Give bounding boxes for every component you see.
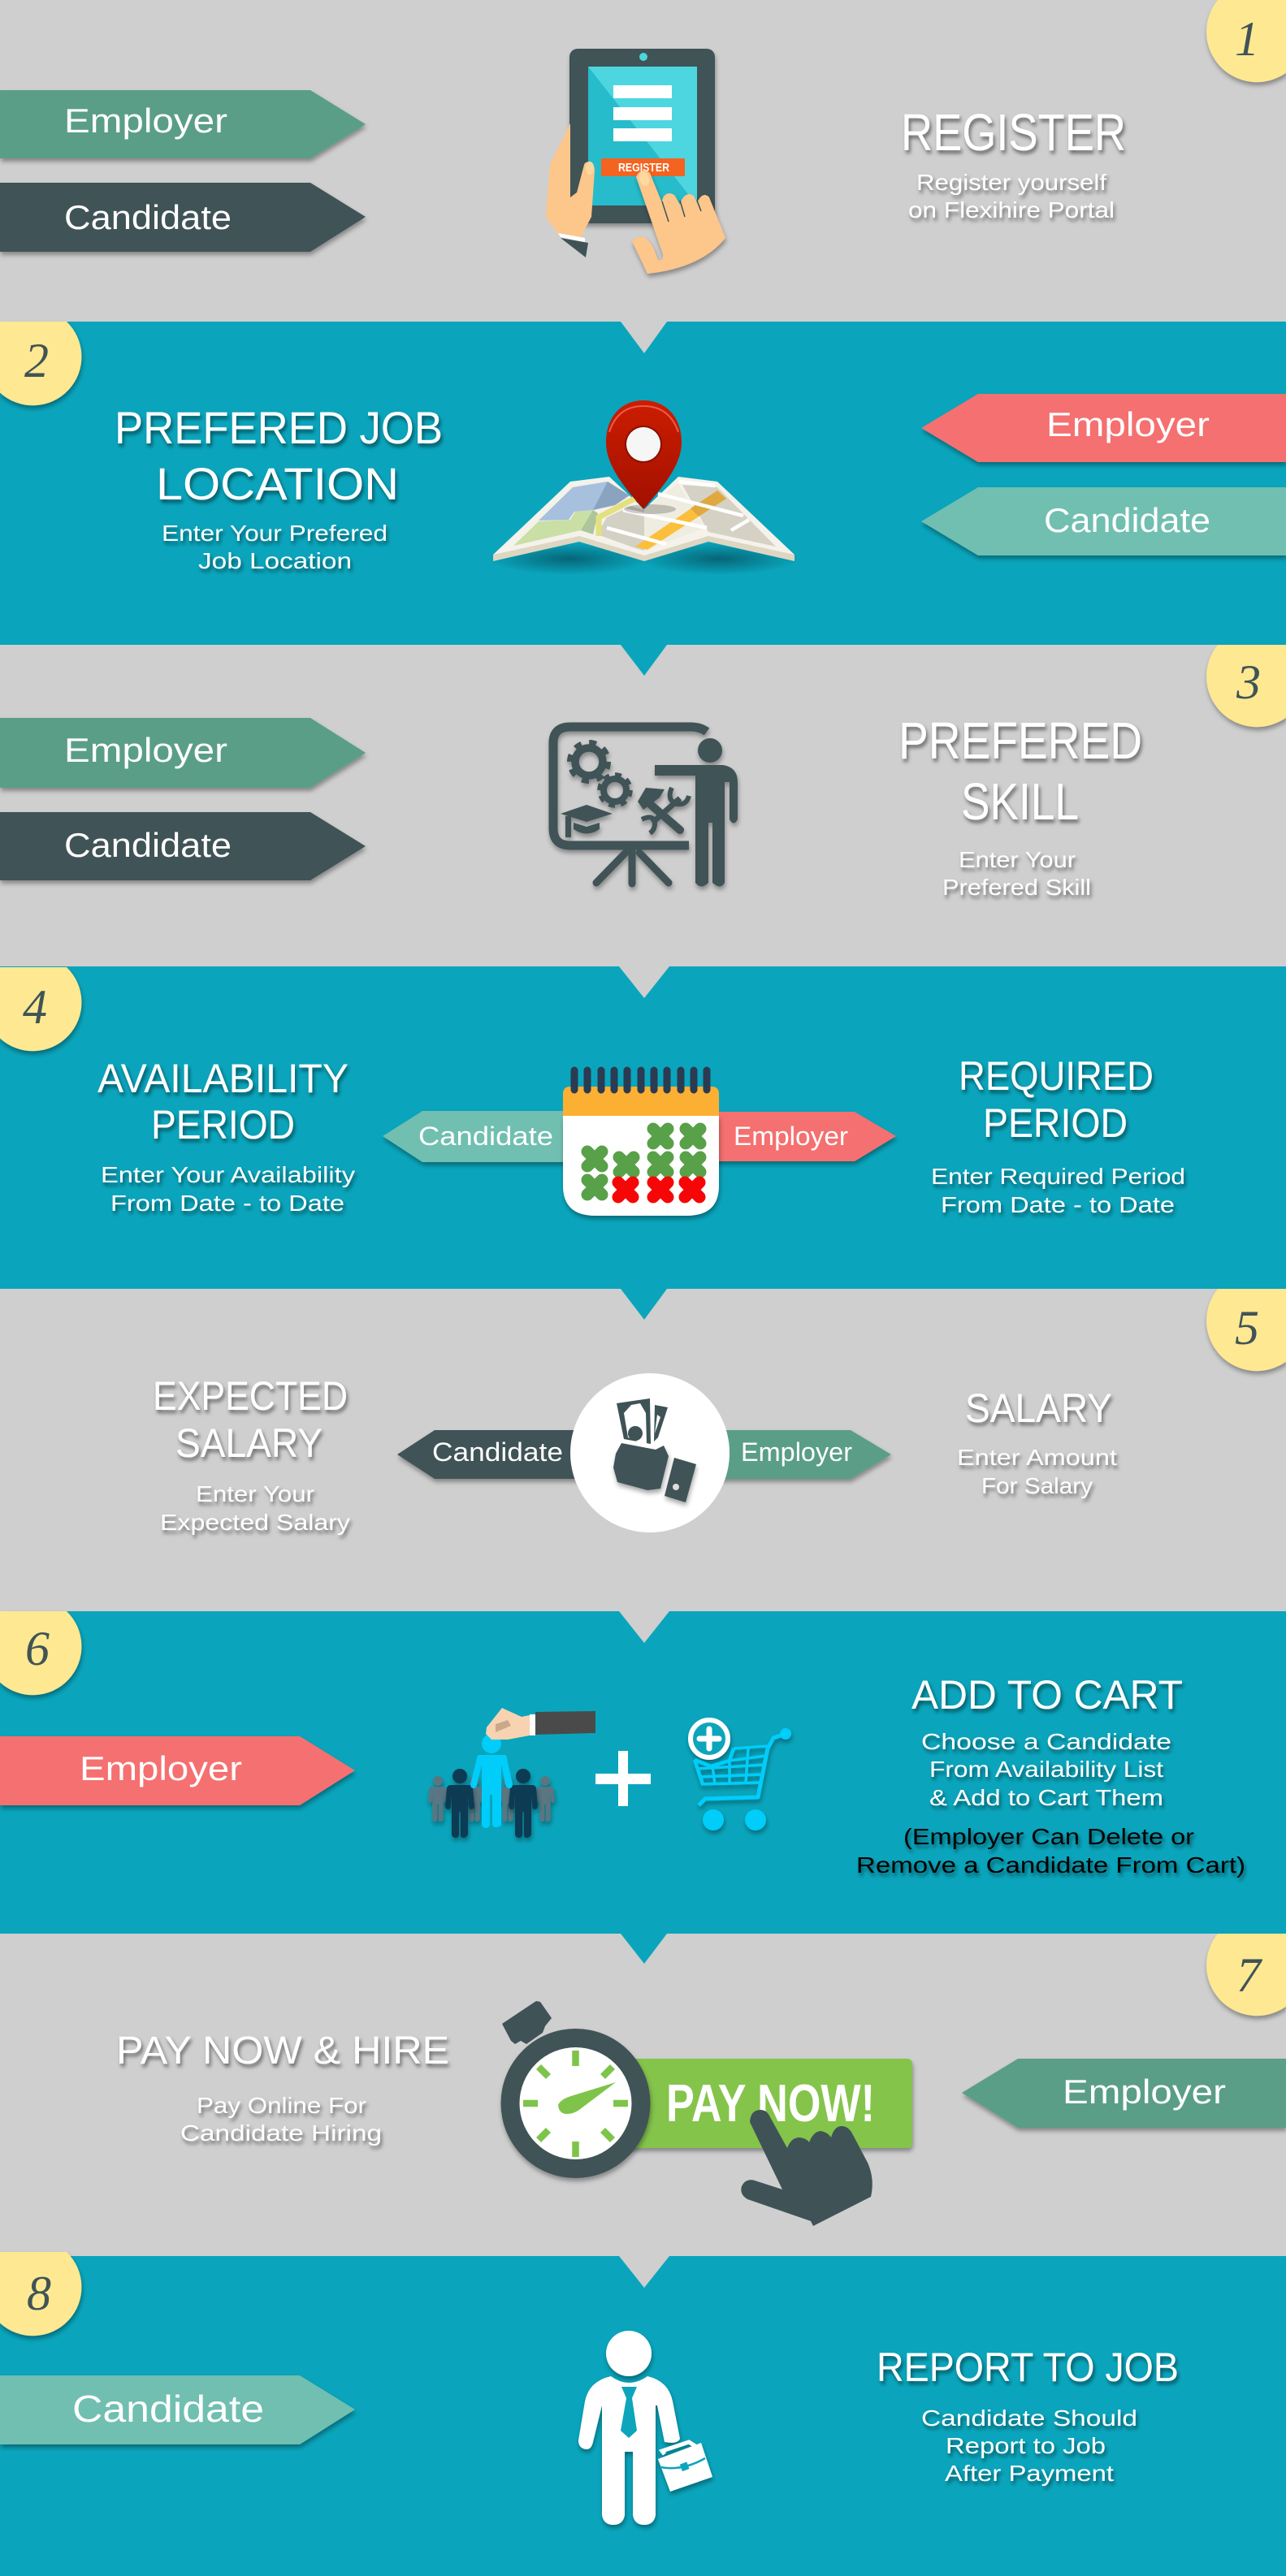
pointer triangle 8 <box>619 2256 669 2288</box>
text: availability description <box>101 1162 355 1216</box>
pointer triangle 2 <box>621 322 667 353</box>
band background 1 <box>0 0 1286 322</box>
text: expected salary description <box>160 1481 350 1535</box>
text: add to cart description: & Add to Cart Them <box>929 1785 1163 1810</box>
arrow: employer <box>0 1736 355 1805</box>
text: skill description: Prefered Skill <box>942 875 1091 900</box>
icon: stopwatch <box>500 2001 650 2178</box>
icon: pointing hand <box>741 2110 872 2226</box>
text: report description: Report to Job <box>946 2433 1106 2458</box>
text: employer note: (Employer Can Delete or <box>903 1824 1194 1849</box>
text: pay description: Pay Online For <box>197 2093 366 2118</box>
arrow: candidate left <box>397 1430 585 1479</box>
text: skill description <box>942 847 1091 900</box>
text: pay description <box>180 2093 382 2146</box>
panel: step 4 period <box>0 966 1286 1289</box>
icon: pay now button <box>626 2059 912 2148</box>
text: pay description: Candidate Hiring <box>180 2120 382 2146</box>
badge number 5: 5 <box>1235 1301 1259 1355</box>
heading: availability period: AVAILABILITY <box>97 1056 349 1101</box>
badge number 7: 7 <box>1236 1948 1263 2002</box>
text: add to cart description: From Availability List <box>929 1757 1163 1782</box>
heading: expected salary <box>153 1373 348 1466</box>
text: register description <box>908 170 1115 223</box>
arrow: employer right: Employer <box>741 1437 852 1467</box>
arrow: candidate: Candidate <box>64 198 232 236</box>
text: availability description: Enter Your Availability <box>101 1162 355 1187</box>
text: required description: From Date - to Date <box>941 1192 1175 1217</box>
text: required description: Enter Required Period <box>931 1164 1185 1189</box>
icon: plus sign <box>595 1751 651 1806</box>
text: add to cart description <box>921 1729 1171 1810</box>
text: location description <box>162 521 388 573</box>
heading: preferred skill: PREFERED <box>898 711 1142 770</box>
arrow: employer right <box>715 1430 891 1479</box>
heading: required period: REQUIRED <box>959 1053 1154 1099</box>
heading: register: REGISTER <box>901 103 1126 162</box>
heading: report to job: REPORT TO JOB <box>877 2345 1179 2390</box>
heading: salary: SALARY <box>965 1385 1112 1431</box>
badge number 4 <box>0 967 81 1051</box>
heading: expected salary: EXPECTED <box>153 1373 348 1419</box>
arrow: employer <box>0 90 366 158</box>
arrow: employer left: Employer <box>1063 2072 1226 2111</box>
badge number 2: 2 <box>24 334 49 387</box>
heading: preferred job location: PREFERED JOB <box>115 402 443 453</box>
pointer triangle 5 <box>621 1289 667 1320</box>
band background 4 <box>0 966 1286 1289</box>
arrow: candidate left <box>383 1111 569 1162</box>
panel: step 8 report to job <box>0 2252 1286 2576</box>
panel: step 7 pay now <box>0 1934 1286 2256</box>
text: availability description: From Date - to Date <box>110 1191 344 1216</box>
pointer triangle 4 <box>619 966 669 998</box>
band background 6 <box>0 1611 1286 1934</box>
text: register description: on Flexihire Portal <box>908 197 1115 223</box>
arrow: candidate <box>0 2375 355 2444</box>
heading: pay now and hire: PAY NOW & HIRE <box>116 2029 449 2072</box>
badge number 1: 1 <box>1235 12 1259 66</box>
band background 7 <box>0 1934 1286 2256</box>
icon: calendar <box>563 1070 719 1216</box>
text: location description: Enter Your Prefered <box>162 521 388 546</box>
arrow: candidate: Candidate <box>64 826 232 864</box>
band background 8 <box>0 2256 1286 2576</box>
arrow: employer: Employer <box>64 102 227 140</box>
icon: selecting a candidate <box>428 1708 595 1838</box>
text: expected salary description: Expected Salary <box>160 1510 350 1535</box>
band background 5 <box>0 1289 1286 1611</box>
text: add to cart description: Choose a Candidate <box>921 1729 1171 1754</box>
panel: step 3 preferred skill <box>0 645 1286 966</box>
text: report description: Candidate Should <box>921 2405 1137 2431</box>
text: location description: Job Location <box>198 548 352 573</box>
panel: step 6 add to cart <box>0 1611 1286 1934</box>
heading: add to cart: ADD TO CART <box>911 1672 1183 1718</box>
arrow: candidate left: Candidate <box>418 1122 553 1151</box>
badge number 5 <box>1206 1289 1286 1371</box>
arrow: employer: Employer <box>64 731 227 769</box>
heading: availability period <box>97 1056 349 1148</box>
badge number 2 <box>0 322 81 405</box>
arrow: employer: Employer <box>80 1749 242 1787</box>
text: salary description <box>957 1445 1117 1498</box>
text: register description: Register yourself <box>916 170 1106 195</box>
heading: preferred skill: SKILL <box>961 772 1079 831</box>
text: salary description: For Salary <box>981 1473 1093 1498</box>
badge number 3 <box>1206 645 1286 727</box>
arrow: employer right: Employer <box>734 1122 848 1151</box>
badge number 6: 6 <box>25 1622 50 1675</box>
panel: step 1 register <box>0 0 1286 322</box>
heading: preferred job location: LOCATION <box>156 458 399 509</box>
badge number 8 <box>0 2252 81 2336</box>
badge number 8: 8 <box>27 2267 51 2320</box>
arrow: candidate: Candidate <box>72 2388 264 2430</box>
text: report description: After Payment <box>945 2461 1114 2486</box>
arrow: employer right <box>921 394 1286 462</box>
text: salary description: Enter Amount <box>957 1445 1117 1470</box>
heading: required period: PERIOD <box>983 1100 1128 1146</box>
text: expected salary description: Enter Your <box>196 1481 314 1506</box>
badge number 3: 3 <box>1236 655 1261 709</box>
badge number 6 <box>0 1611 81 1695</box>
badge number 7 <box>1206 1934 1286 2016</box>
text: employer note <box>856 1824 1245 1878</box>
heading: expected salary: SALARY <box>175 1420 323 1466</box>
pointer triangle 6 <box>619 1611 669 1643</box>
badge number 4: 4 <box>23 980 47 1034</box>
text: report description <box>921 2405 1137 2486</box>
arrow: candidate right <box>921 487 1286 555</box>
text: skill description: Enter Your <box>959 847 1076 872</box>
panel: step 5 salary <box>0 1289 1286 1611</box>
icon: shopping cart <box>691 1720 791 1830</box>
arrow: employer right <box>715 1112 896 1161</box>
arrow: employer right: Employer <box>1046 405 1210 443</box>
band background 2 <box>0 322 1286 645</box>
icon: businessman with briefcase <box>578 2331 712 2525</box>
pointer triangle 7 <box>621 1934 667 1964</box>
icon: tablet with hands <box>546 49 725 274</box>
pointer triangle 3 <box>621 645 667 676</box>
arrow: candidate <box>0 812 366 880</box>
text: required description <box>931 1164 1185 1217</box>
heading: preferred skill <box>898 711 1142 831</box>
arrow: candidate left: Candidate <box>432 1437 563 1467</box>
arrow: candidate <box>0 183 366 252</box>
badge number 1 <box>1206 0 1286 82</box>
arrow: employer <box>0 718 366 788</box>
icon: presenter with board <box>553 727 738 887</box>
heading: preferred job location <box>115 402 443 509</box>
icon: pay now button: PAY NOW! <box>666 2073 875 2133</box>
band background 3 <box>0 645 1286 966</box>
panel: step 2 preferred location <box>0 322 1286 645</box>
arrow: employer left <box>962 2059 1286 2128</box>
icon: tablet with hands: REGISTER <box>618 161 669 175</box>
heading: availability period: PERIOD <box>151 1102 295 1148</box>
arrow: candidate right: Candidate <box>1044 501 1210 539</box>
icon: map and pin <box>487 400 800 575</box>
heading: required period <box>959 1053 1154 1146</box>
text: employer note: Remove a Candidate From Cart) <box>856 1852 1245 1878</box>
icon: money in hand <box>570 1373 730 1532</box>
